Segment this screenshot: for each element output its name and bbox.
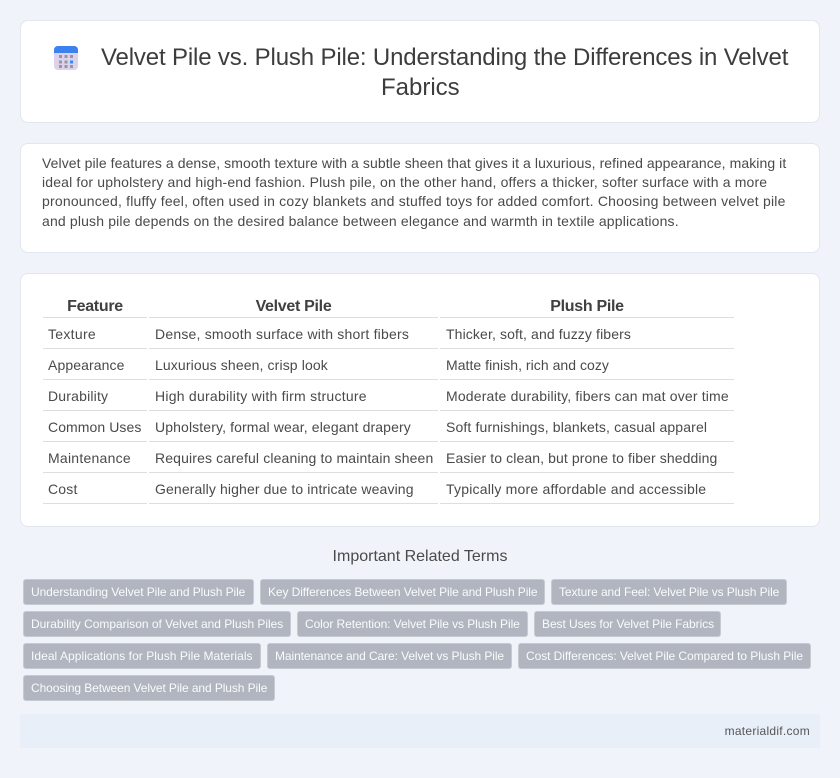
tag group: related terms: Maintenance and Care: Velvet vs Plush Pile: [275, 649, 504, 663]
text block: description: pronounced, fluffy feel, often used in cozy blankets and stuffed toys for added comfort. Choosing between velvet pile: [42, 193, 786, 209]
title: Fabrics: [381, 74, 460, 101]
text block: description: and plush pile depends on the desired balance between elegance and warmth in textile applications.: [42, 213, 679, 229]
table row: common uses: Upholstery, formal wear, elegant drapery: [155, 419, 411, 435]
text block: description: ideal for upholstery and high-end fashion. Plush pile, on the other hand, offers a thicker, softer surface with a more: [42, 174, 767, 190]
text block: description: [42, 155, 786, 229]
table row: cost: [43, 481, 734, 504]
title: Velvet Pile vs. Plush Pile: Understanding the Differences in Velvet: [101, 44, 788, 71]
table row: cost: Generally higher due to intricate weaving: [155, 481, 414, 497]
tag group: related terms: [23, 579, 811, 701]
tag group: related terms: Color Retention: Velvet Pile vs Plush Pile: [305, 617, 520, 631]
table row: texture: Thicker, soft, and fuzzy fibers: [446, 326, 631, 342]
table row: durability: Durability: [48, 388, 108, 404]
title: [101, 44, 788, 101]
tag group: related terms: Key Differences Between Velvet Pile and Plush Pile: [268, 585, 537, 599]
tag group: related terms: Durability Comparison of Velvet and Plush Piles: [31, 617, 283, 631]
footer source text: materialdif.com: [725, 724, 810, 738]
table row: maintenance: Requires careful cleaning to maintain sheen: [155, 450, 433, 466]
tag group: related terms: Cost Differences: Velvet Pile Compared to Plush Pile: [526, 649, 803, 663]
tag group: related terms: Texture and Feel: Velvet Pile vs Plush Pile: [559, 585, 779, 599]
table row: cost: Typically more affordable and accessible: [446, 481, 706, 497]
table header row: [43, 298, 734, 318]
heading: important related terms: Important Related Terms: [333, 548, 507, 565]
table row: appearance: Appearance: [48, 357, 125, 373]
table row: appearance: Luxurious sheen, crisp look: [155, 357, 328, 373]
table row: common uses: Common Uses: [48, 419, 141, 435]
table header row: Feature: [67, 298, 123, 315]
panel: header: [20, 20, 820, 123]
table row: texture: Dense, smooth surface with short fibers: [155, 326, 409, 342]
tag group: related terms: Ideal Applications for Plush Pile Materials: [31, 649, 253, 663]
tag group: related terms: Understanding Velvet Pile and Plush Pile: [31, 585, 245, 599]
text block: description: Velvet pile features a dense, smooth texture with a subtle sheen that gives it a luxurious, refined appearance, making it: [42, 155, 786, 171]
panel: comparison table: [20, 273, 820, 527]
table row: texture: Texture: [48, 326, 96, 342]
footer bar: [20, 714, 820, 748]
table row: durability: High durability with firm structure: [155, 388, 367, 404]
table row: maintenance: Easier to clean, but prone to fiber shedding: [446, 450, 717, 466]
table row: maintenance: [43, 450, 734, 473]
table row: common uses: Soft furnishings, blankets, casual apparel: [446, 419, 707, 435]
table row: cost: Cost: [48, 481, 78, 497]
tag group: related terms: Best Uses for Velvet Pile Fabrics: [542, 617, 714, 631]
table header row: Plush Pile: [550, 298, 624, 315]
table row: common uses: [43, 419, 734, 442]
table row: appearance: [43, 357, 734, 380]
table row: durability: [43, 388, 734, 411]
panel: description: [20, 143, 820, 253]
table row: durability: Moderate durability, fibers can mat over time: [446, 388, 729, 404]
icon: calendar: [54, 46, 78, 70]
table row: appearance: Matte finish, rich and cozy: [446, 357, 609, 373]
table row: maintenance: Maintenance: [48, 450, 131, 466]
table header row: Velvet Pile: [256, 298, 331, 315]
tag group: related terms: Choosing Between Velvet Pile and Plush Pile: [31, 681, 267, 695]
table row: texture: [43, 326, 734, 349]
